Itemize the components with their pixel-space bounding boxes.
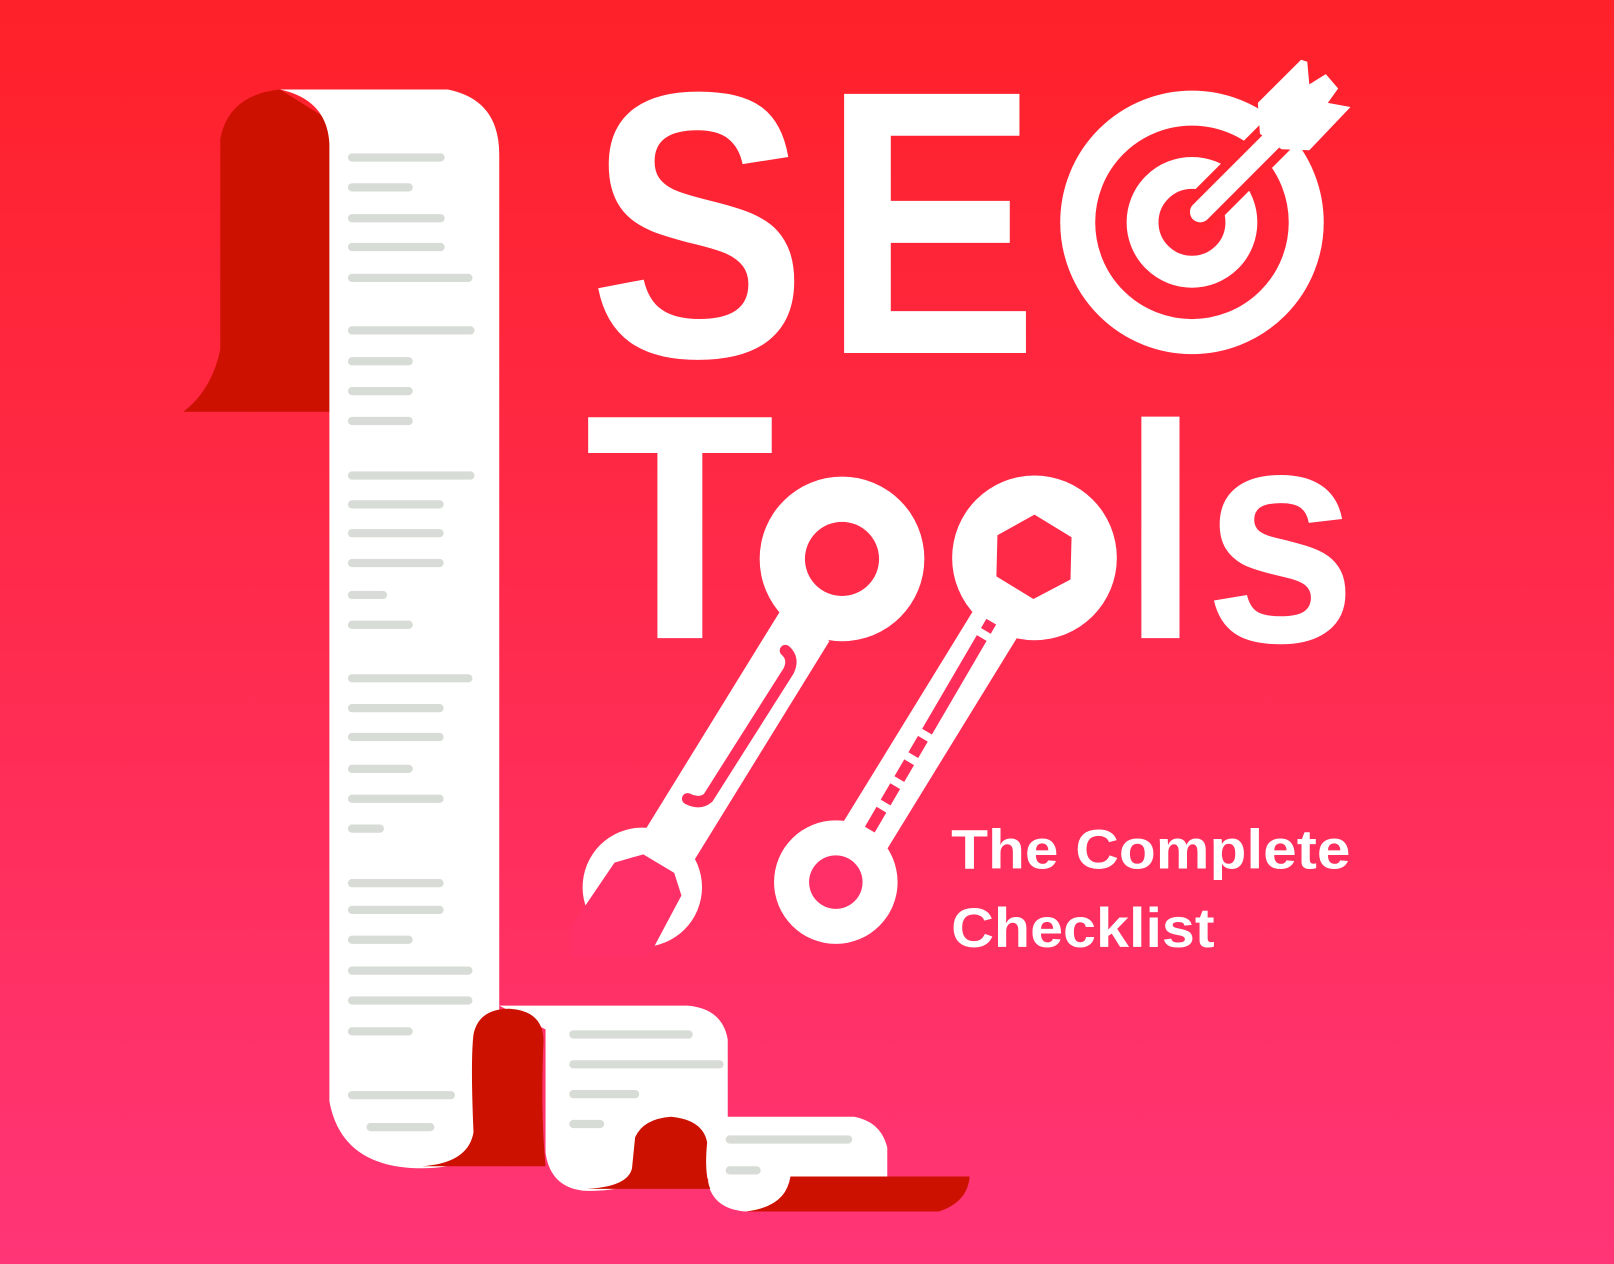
title: Tools bbox=[585, 348, 1357, 707]
red curl 2 bbox=[587, 1117, 710, 1189]
scroll main strip bbox=[280, 90, 499, 1168]
scroll segment 3 bbox=[708, 1117, 887, 1212]
scroll segment 2 bbox=[499, 1006, 728, 1191]
subtitle: The Complete bbox=[951, 819, 1350, 881]
checklist lines bbox=[352, 157, 848, 1170]
red curl 1 bbox=[422, 1009, 546, 1166]
icon: target with arrow bbox=[1078, 60, 1350, 337]
red tail bbox=[746, 1177, 970, 1212]
icon: wrench 2 bbox=[774, 476, 1117, 944]
subtitle: Checklist bbox=[951, 897, 1215, 959]
title: Tools: l bbox=[1122, 361, 1199, 703]
title: SEO bbox=[589, 12, 1039, 437]
scroll illustration bbox=[183, 90, 970, 1212]
title: Tools: T bbox=[585, 348, 775, 707]
title: SEO: E bbox=[822, 12, 1039, 433]
subtitle bbox=[951, 819, 1350, 959]
icon: wrench 1 bbox=[571, 477, 924, 957]
title: SEO: S bbox=[589, 14, 807, 437]
scroll back curl bbox=[183, 90, 335, 412]
title: Tools: s bbox=[1204, 362, 1357, 707]
